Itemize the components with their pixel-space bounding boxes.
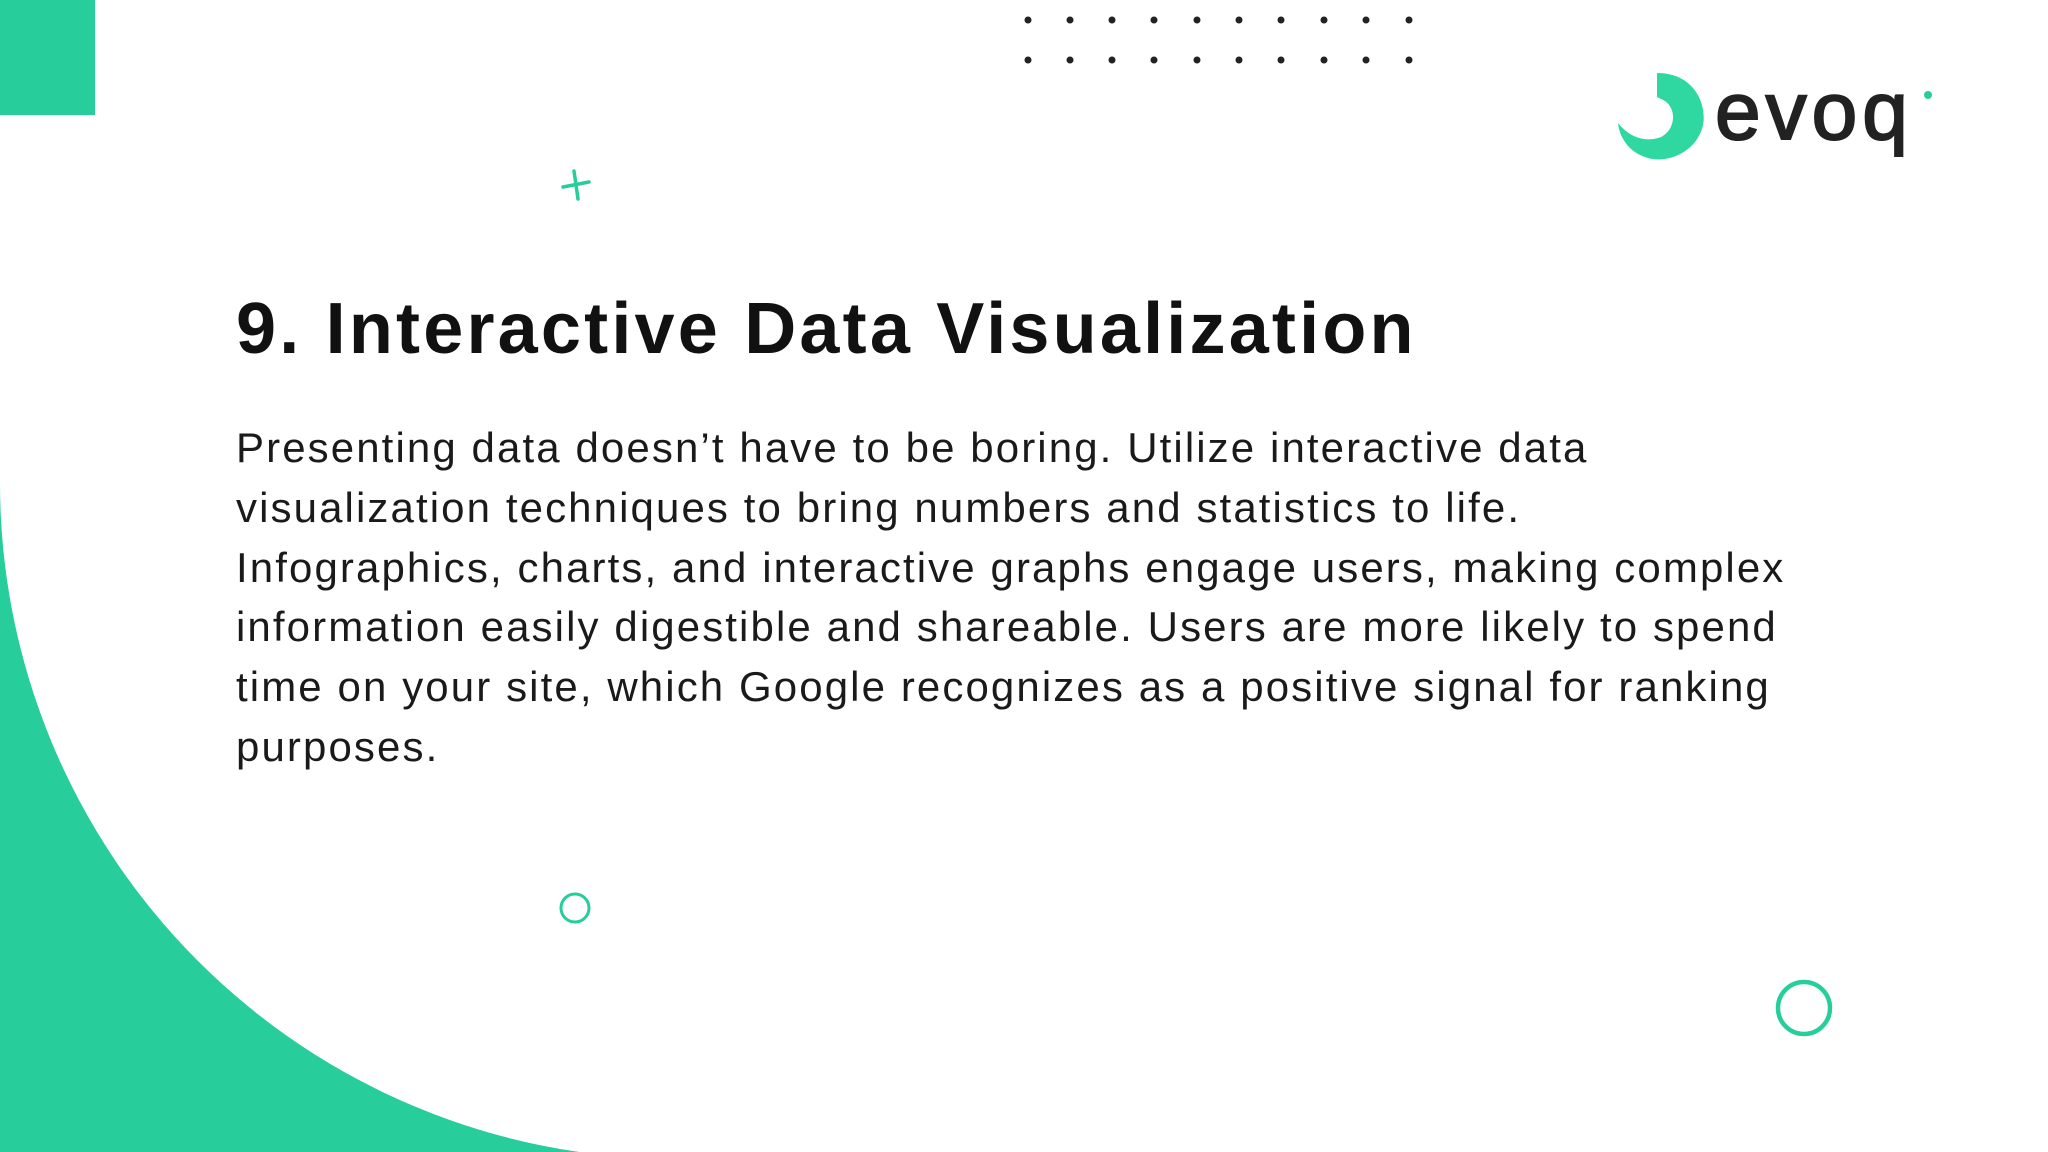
- body text: visualization techniques to bring numbers and statistics to life.: [236, 484, 1521, 531]
- corner square: [0, 0, 95, 115]
- body text: time on your site, which Google recognizes as a positive signal for ranking: [236, 663, 1771, 710]
- body text: [236, 424, 1785, 770]
- body text: Presenting data doesn’t have to be boring. Utilize interactive data: [236, 424, 1588, 471]
- body text: purposes.: [236, 723, 439, 770]
- logo text: evoq: [1715, 66, 1913, 157]
- logo: [1618, 66, 1932, 160]
- icon: plus sign: [561, 169, 591, 201]
- body text: Infographics, charts, and interactive graphs engage users, making complex: [236, 544, 1785, 591]
- icon: logo swirl: [1618, 73, 1704, 159]
- icon: large ring: [1776, 980, 1832, 1036]
- title: 9. Interactive Data Visualization: [236, 289, 1417, 369]
- body text: information easily digestible and shareable. Users are more likely to spend: [236, 603, 1778, 650]
- icon: small ring: [560, 892, 590, 924]
- dot grid: [1024, 16, 1412, 64]
